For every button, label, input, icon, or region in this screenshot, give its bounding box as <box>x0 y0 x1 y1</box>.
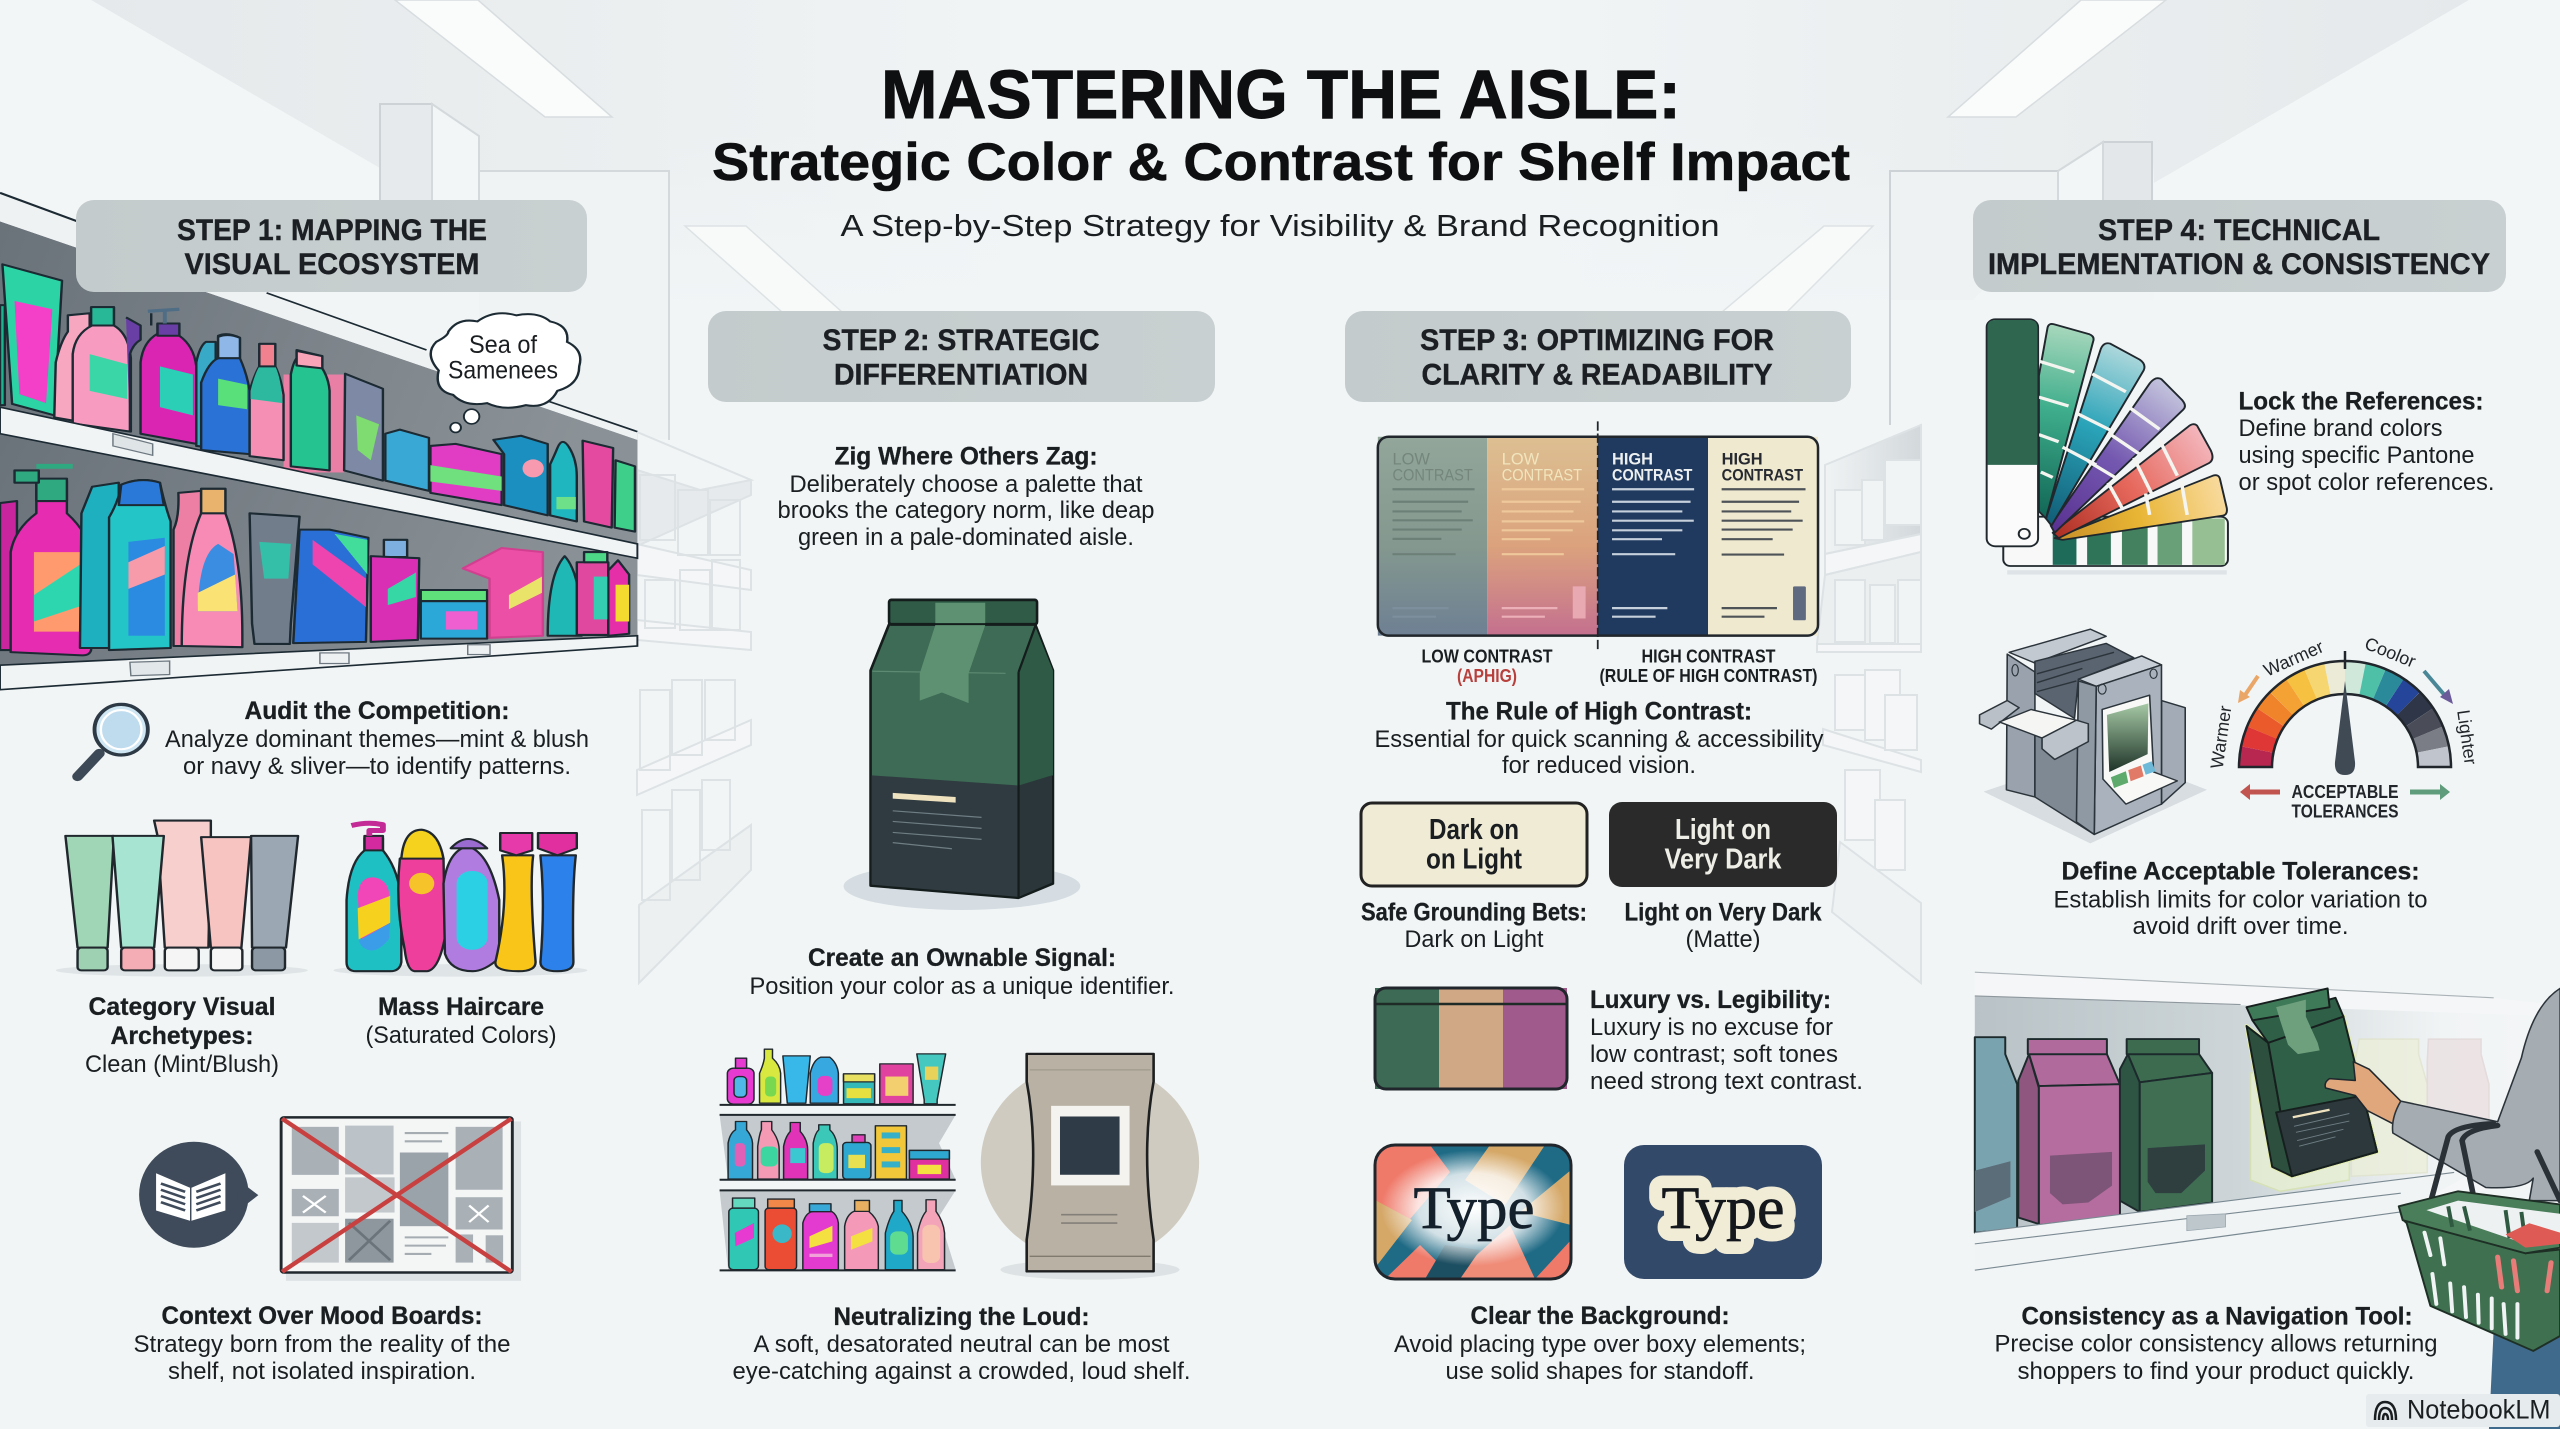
heading: step 3: CLARITY & READABILITY <box>1422 358 1772 392</box>
text: neutralizing the loud: A soft, desatorated neutral can be most <box>754 1331 1170 1358</box>
text: zig where others zag: green in a pale-dominated aisle. <box>798 524 1134 551</box>
title block <box>712 56 1850 243</box>
text: create an ownable signal: Create an Ownable Signal: <box>808 944 1116 972</box>
text: safe grounding bets: Dark on Light <box>1404 926 1544 953</box>
heading: step 3: STEP 3: OPTIMIZING FOR <box>1420 324 1774 357</box>
text: category visual archetypes: Archetypes: <box>110 1022 254 1050</box>
chart: tolerance gauge: Warmer <box>2207 704 2235 770</box>
text: lock the references: using specific Pantone <box>2238 442 2474 469</box>
text: luxury vs legibility: Luxury vs. Legibility: <box>1590 986 1831 1014</box>
text: neutralizing the loud <box>732 1303 1190 1385</box>
illustration: crossed out mood board <box>281 1117 521 1281</box>
text: luxury vs legibility: need strong text contrast. <box>1590 1068 1863 1095</box>
text: context over mood boards <box>134 1302 510 1385</box>
faded right background shelves <box>1817 425 1921 983</box>
badge: NotebookLM: NotebookLM <box>2407 1394 2550 1424</box>
text: clear the background: use solid shapes for standoff. <box>1446 1358 1754 1385</box>
text: luxury vs legibility: low contrast; soft tones <box>1590 1041 1838 1068</box>
illustration: deep green bag <box>844 600 1080 910</box>
heading: step 4: IMPLEMENTATION & CONSISTENCY <box>1988 248 2490 281</box>
label: high contrast: HIGH CONTRAST <box>1642 646 1776 666</box>
illustration: pantone colour fan <box>1987 319 2228 575</box>
button: light on very dark: Light on <box>1675 814 1771 846</box>
heading: step 4: STEP 4: TECHNICAL <box>2098 214 2380 247</box>
chart: tolerance gauge: Lighter <box>2453 709 2481 766</box>
example: type on solid shape: Type <box>1662 1175 1784 1241</box>
text: consistency as a navigation tool: Consistency as a Navigation Tool: <box>2022 1302 2412 1330</box>
heading: step 4 <box>1973 200 2506 292</box>
text: lock the references <box>2238 388 2494 496</box>
text: consistency as a navigation tool: shoppers to find your product quickly. <box>2018 1358 2414 1385</box>
title block: A Step-by-Step Strategy for Visibility & Brand Recognition <box>840 208 1720 243</box>
panel: step 1 <box>0 191 637 1385</box>
text: rule of high contrast <box>1374 698 1824 779</box>
example: type over busy background <box>1375 1145 1571 1279</box>
text: mass haircare: Mass Haircare <box>378 993 544 1021</box>
chart: tolerance gauge: TOLERANCES <box>2292 802 2398 822</box>
chart: low vs high contrast cards: CONTRAST <box>1612 466 1692 484</box>
gauge needle <box>2335 681 2355 775</box>
chart: low vs high contrast cards: CONTRAST <box>1502 466 1582 484</box>
heading: step 3 <box>1345 311 1851 402</box>
heading: step 2: STEP 2: STRATEGIC <box>822 324 1100 357</box>
text: audit the competition: Audit the Competition: <box>244 697 510 725</box>
text: light on very dark matte: Light on Very Dark <box>1624 898 1822 926</box>
chart: tolerance gauge <box>2207 633 2481 822</box>
chart: low vs high contrast cards: LOW <box>1502 450 1540 468</box>
chart: low vs high contrast cards: CONTRAST <box>1722 466 1803 484</box>
text: category visual archetypes: Category Visual <box>88 993 276 1021</box>
illustration: shopper reaching for green bag <box>1975 972 2560 1429</box>
text: lock the references: or spot color references. <box>2238 469 2494 496</box>
panel: step 2 <box>708 311 1215 1385</box>
text: rule of high contrast: The Rule of High Contrast: <box>1446 698 1752 726</box>
text: zig where others zag: Zig Where Others Zag: <box>834 442 1098 470</box>
example: type on solid shape: Type <box>1662 1175 1784 1241</box>
button: dark on light <box>1361 803 1587 886</box>
text: neutralizing the loud: Neutralizing the Loud: <box>834 1303 1090 1331</box>
text: context over mood boards: shelf, not isolated inspiration. <box>168 1358 476 1385</box>
text: lock the references: Lock the References: <box>2238 388 2484 416</box>
chart: low vs high contrast cards: HIGH <box>1722 450 1763 468</box>
example: type on solid shape <box>1624 1145 1822 1279</box>
illustration: neutral pouch <box>981 1054 1199 1280</box>
text: safe grounding bets: Safe Grounding Bets: <box>1361 898 1587 926</box>
chart: low vs high contrast cards: CONTRAST <box>1392 466 1473 484</box>
text: context over mood boards: Strategy born from the reality of the <box>134 1331 510 1358</box>
text: rule of high contrast: for reduced vision. <box>1502 752 1696 779</box>
text: mass haircare: (Saturated Colors) <box>366 1022 556 1049</box>
label: low contrast: LOW CONTRAST <box>1422 646 1552 666</box>
chart: low vs high contrast cards <box>1378 421 1818 650</box>
button: light on very dark <box>1609 802 1837 887</box>
illustration: mass haircare bottles <box>333 823 587 977</box>
button: light on very dark: Very Dark <box>1664 844 1782 876</box>
text: audit the competition: or navy & sliver—to identify patterns. <box>183 753 571 780</box>
label: low contrast: (APHIG) <box>1457 666 1517 686</box>
panel: step 4 <box>1973 200 2560 1429</box>
text: rule of high contrast: Essential for quick scanning & accessibility <box>1374 726 1824 753</box>
text: audit the competition: Analyze dominant themes—mint & blush <box>165 726 589 753</box>
text: clear the background: Avoid placing type over boxy elements; <box>1394 1331 1806 1358</box>
text: category visual archetypes <box>85 993 279 1078</box>
label: low contrast <box>1422 646 1552 686</box>
text: define acceptable tolerances <box>2054 858 2428 940</box>
text: create an ownable signal: Position your color as a unique identifier. <box>750 973 1174 1000</box>
heading: step 1 <box>76 200 587 292</box>
icon: magnifying glass <box>78 704 148 777</box>
heading: step 1: VISUAL ECOSYSTEM <box>184 248 480 281</box>
chart: tolerance gauge: Coolor <box>2362 633 2419 672</box>
illustration: clean tubes <box>56 821 308 977</box>
panel: step 3 <box>1345 311 1863 1385</box>
text: zig where others zag: Deliberately choose a palette that <box>790 471 1143 498</box>
button: dark on light: on Light <box>1426 844 1522 876</box>
text: clear the background <box>1394 1302 1806 1385</box>
heading: step 2 <box>708 311 1215 402</box>
chart: tolerance gauge: Warmer <box>2261 637 2327 681</box>
text: neutralizing the loud: eye-catching against a crowded, loud shelf. <box>732 1358 1190 1385</box>
label: high contrast <box>1600 646 1818 686</box>
text: zig where others zag <box>778 442 1154 551</box>
text: mass haircare <box>366 993 556 1049</box>
swatch: luxury palette <box>1375 988 1567 1089</box>
callout: sea of sameness thought bubble: Samenees <box>448 356 558 384</box>
faded left background shelves <box>637 432 751 983</box>
illustration: loud mini shelves <box>720 1049 956 1270</box>
chart: low vs high contrast cards: HIGH <box>1612 450 1653 468</box>
illustration: crowded shelf <box>0 191 637 693</box>
title block: Strategic Color & Contrast for Shelf Impact <box>712 133 1850 192</box>
example: type over busy background: Type <box>1414 1175 1534 1241</box>
button: dark on light: Dark on <box>1429 814 1519 846</box>
text: define acceptable tolerances: Define Acceptable Tolerances: <box>2062 858 2420 886</box>
callout: sea of sameness thought bubble: Sea of <box>469 331 537 359</box>
text: category visual archetypes: Clean (Mint/Blush) <box>85 1051 279 1078</box>
text: define acceptable tolerances: avoid drift over time. <box>2132 913 2348 940</box>
text: zig where others zag: brooks the category norm, like deap <box>778 497 1154 524</box>
title block: MASTERING THE AISLE: <box>881 56 1681 133</box>
text: luxury vs legibility: Luxury is no excuse for <box>1590 1014 1833 1041</box>
chart: low vs high contrast cards: LOW <box>1392 450 1430 468</box>
text: luxury vs legibility <box>1590 986 1863 1095</box>
chart: tolerance gauge: ACCEPTABLE <box>2292 782 2398 802</box>
illustration: printing press <box>1980 629 2207 843</box>
label: high contrast: (RULE OF HIGH CONTRAST) <box>1600 666 1818 686</box>
text: light on very dark matte: (Matte) <box>1686 926 1760 953</box>
text: define acceptable tolerances: Establish limits for color variation to <box>2054 886 2428 914</box>
text: lock the references: Define brand colors <box>2238 415 2442 442</box>
callout: sea of sameness thought bubble <box>431 313 580 432</box>
text: clear the background: Clear the Background: <box>1470 1302 1730 1330</box>
text: safe grounding bets <box>1361 898 1587 953</box>
text: context over mood boards: Context Over Mood Boards: <box>162 1302 482 1330</box>
heading: step 1: STEP 1: MAPPING THE <box>177 214 487 247</box>
text: consistency as a navigation tool <box>1994 1302 2438 1385</box>
text: light on very dark matte <box>1624 898 1822 953</box>
heading: step 2: DIFFERENTIATION <box>834 358 1088 392</box>
text: audit the competition <box>165 697 589 780</box>
icon: open book speech bubble <box>139 1142 258 1248</box>
text: create an ownable signal <box>750 944 1174 1000</box>
text: consistency as a navigation tool: Precise color consistency allows returning <box>1994 1330 2438 1358</box>
